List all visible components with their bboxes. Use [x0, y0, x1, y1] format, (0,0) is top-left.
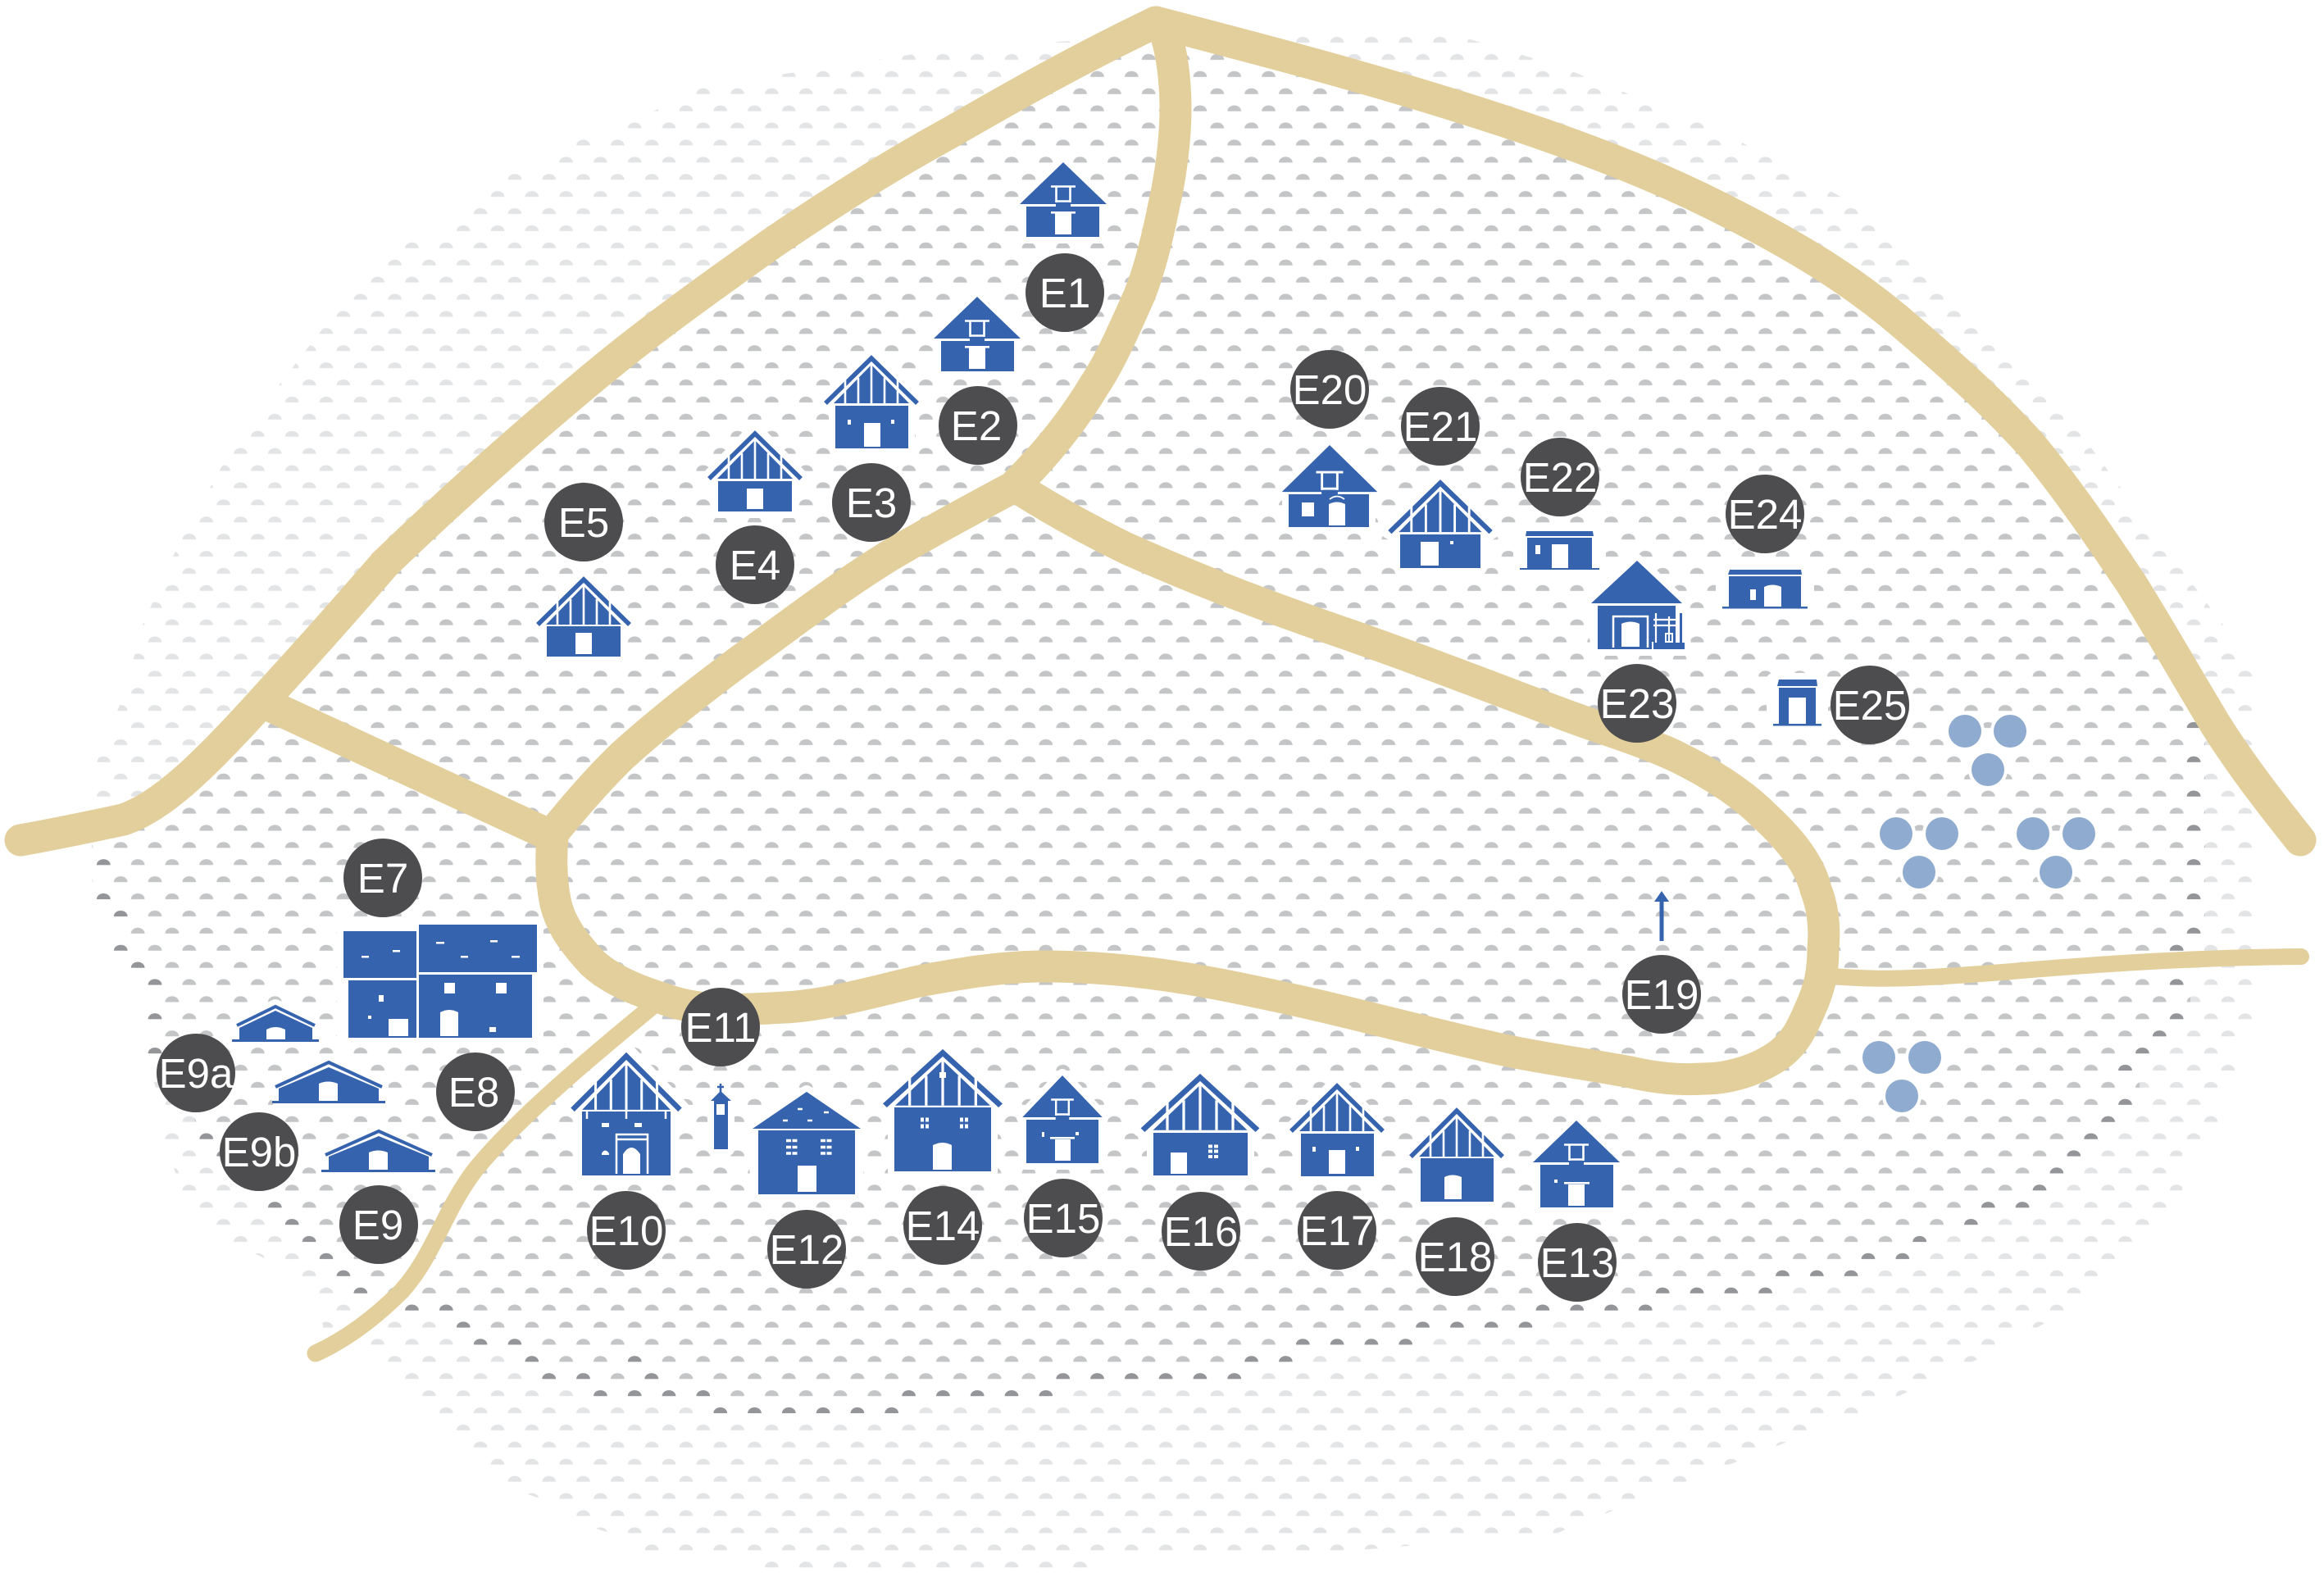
marker E18	[1416, 1217, 1494, 1296]
marker E5	[544, 483, 623, 561]
marker E25	[1831, 666, 1909, 744]
icon: tower E11	[711, 1084, 731, 1149]
marker E23	[1598, 664, 1676, 743]
marker E3: E3	[846, 480, 897, 526]
icon: house E20	[1282, 445, 1377, 527]
marker E12: E12	[770, 1226, 844, 1273]
marker E16	[1162, 1192, 1240, 1271]
marker E15	[1024, 1179, 1103, 1257]
icon: barn E9	[321, 1130, 435, 1172]
marker E22	[1521, 438, 1599, 516]
icon: house E18	[1409, 1106, 1504, 1202]
marker E13: E13	[1540, 1239, 1614, 1286]
marker E18: E18	[1418, 1234, 1492, 1280]
icon: house E10	[571, 1050, 682, 1175]
marker E9a	[157, 1034, 235, 1112]
trees: cluster 3	[2017, 817, 2095, 889]
trees: cluster 4	[1862, 1041, 1941, 1112]
icon: house E16	[1141, 1071, 1259, 1175]
marker E16: E16	[1164, 1208, 1238, 1255]
trees: cluster 2	[1880, 817, 1958, 889]
icon: gateway E25	[1773, 680, 1821, 726]
marker E22: E22	[1523, 454, 1597, 501]
marker E21	[1401, 387, 1480, 466]
icon: house E21	[1388, 478, 1493, 568]
marker E15: E15	[1026, 1195, 1100, 1242]
marker E10: E10	[589, 1207, 663, 1254]
marker E9	[339, 1185, 418, 1264]
marker E21: E21	[1403, 403, 1477, 450]
icon: house E3	[824, 353, 919, 448]
icon: house E17	[1289, 1081, 1385, 1176]
icon: house E22	[1520, 531, 1599, 570]
marker E24: E24	[1728, 491, 1802, 538]
marker E5: E5	[558, 499, 609, 546]
icon: house E5	[536, 575, 631, 657]
marker E13	[1538, 1223, 1617, 1302]
icon: wayside arrow E19	[1654, 891, 1669, 941]
marker E9a: E9a	[159, 1050, 234, 1097]
icon: house E1	[1020, 162, 1107, 237]
marker E19	[1622, 955, 1701, 1034]
icon: house E12	[753, 1092, 861, 1194]
marker E9b	[220, 1112, 298, 1191]
marker E7: E7	[357, 855, 408, 902]
marker E11: E11	[685, 1004, 756, 1051]
marker E4	[716, 525, 794, 604]
icon: house E15	[1022, 1075, 1103, 1163]
trees: cluster 1	[1949, 715, 2026, 786]
marker E1	[1026, 253, 1104, 332]
icon: house E24	[1722, 570, 1808, 608]
marker E23: E23	[1600, 680, 1674, 727]
marker E17	[1298, 1191, 1376, 1270]
marker E14	[903, 1186, 982, 1265]
marker E9b: E9b	[222, 1129, 296, 1175]
marker E4: E4	[730, 542, 780, 589]
marker E25: E25	[1833, 682, 1907, 729]
icon: house E13	[1533, 1121, 1620, 1207]
marker E20	[1290, 350, 1369, 429]
icon: house E14	[883, 1047, 1003, 1171]
icon: barn E9b	[272, 1062, 385, 1103]
icon: building complex E7 and E8	[343, 925, 537, 1038]
marker E14: E14	[906, 1202, 980, 1249]
marker E7	[343, 839, 422, 917]
marker E2	[939, 386, 1017, 465]
dotted ground: dark boundary dots	[97, 722, 2200, 1413]
marker E3	[832, 463, 911, 542]
marker E11	[681, 988, 760, 1066]
marker E24	[1726, 475, 1804, 553]
marker E20: E20	[1293, 366, 1367, 413]
marker E19: E19	[1625, 971, 1699, 1018]
marker E17: E17	[1300, 1207, 1374, 1254]
marker E9: E9	[352, 1202, 403, 1248]
icon: house E2	[934, 297, 1021, 371]
icon: barn E9a	[232, 1006, 319, 1042]
marker E12	[767, 1210, 846, 1289]
marker E2: E2	[951, 402, 1002, 449]
marker E10	[587, 1191, 666, 1270]
marker E8	[436, 1052, 515, 1131]
marker E8: E8	[448, 1069, 499, 1116]
marker E1: E1	[1039, 270, 1090, 316]
icon: house E23	[1591, 561, 1685, 649]
icon: house E4	[707, 429, 803, 511]
